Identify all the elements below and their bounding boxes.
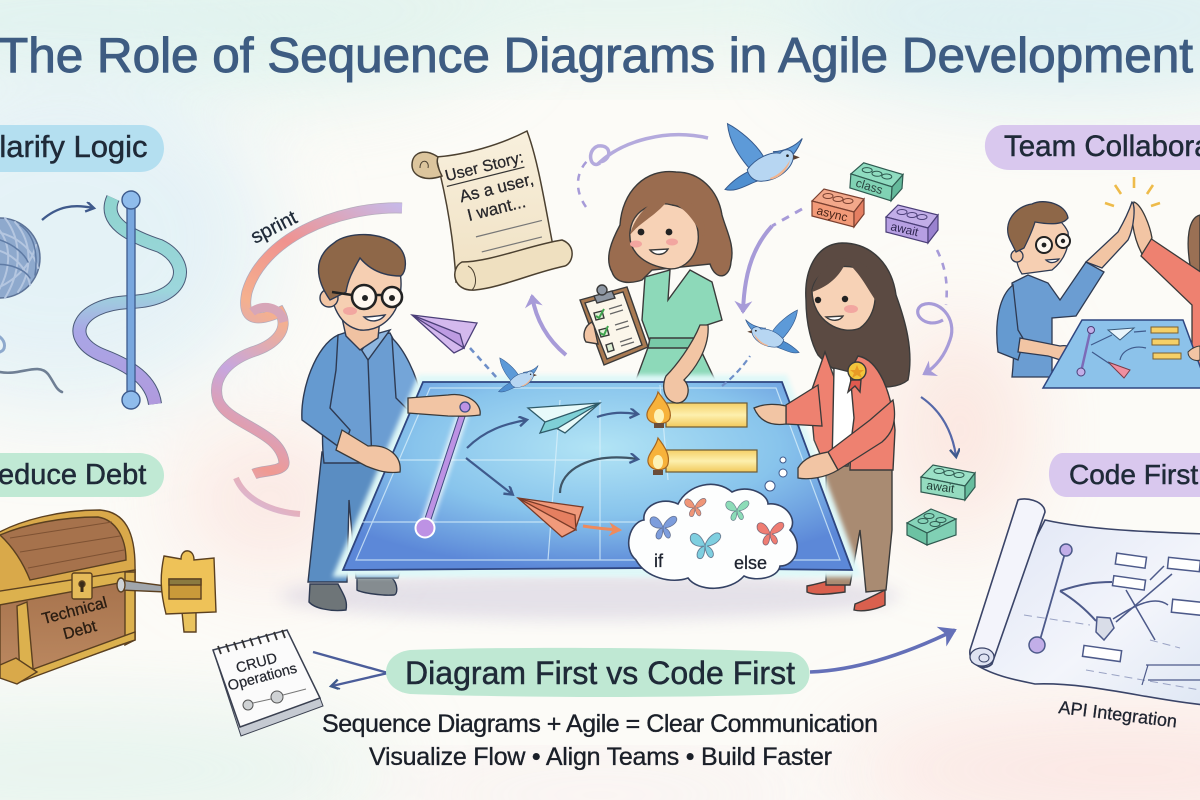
panel: code first — [970, 453, 1200, 731]
character: man with glasses — [302, 235, 420, 611]
heading pill: clarify logic — [0, 125, 164, 172]
arrow: yarn to lifeline — [42, 206, 93, 220]
woman jacket — [810, 352, 838, 468]
heading pill: code first — [1049, 453, 1200, 497]
purple loop arrows — [532, 135, 952, 374]
chest label: Technical — [40, 594, 109, 628]
woman shoes — [807, 577, 885, 611]
icon: bluebird left — [498, 358, 538, 392]
woman hand — [584, 322, 598, 344]
man shirt — [323, 329, 412, 463]
lego brick: await purple: await — [889, 219, 920, 239]
arrow orange — [583, 526, 620, 530]
floor shadow — [280, 572, 900, 620]
ribbon around lifeline — [79, 198, 180, 404]
woman face — [812, 266, 875, 330]
summary text: Visualize Flow • Align Teams • Build Faster — [369, 743, 832, 771]
scroll text: I want... — [465, 192, 528, 225]
notepad: crud operations — [213, 630, 323, 736]
character: woman in coral jacket — [806, 243, 910, 611]
icon: bluebird large — [725, 124, 802, 190]
heading pill: reduce debt — [0, 453, 164, 497]
heading pill: code first: Code First — [1069, 459, 1198, 490]
summary text — [322, 710, 878, 771]
lego brick: class — [849, 162, 904, 202]
arrow: notepad to diagram first — [313, 652, 388, 686]
scroll text: As a user, — [458, 170, 536, 206]
man glasses — [332, 285, 402, 309]
user story scroll — [412, 131, 572, 290]
woman arm over table — [664, 325, 708, 403]
coral teammate — [1132, 202, 1200, 365]
glowing bar 1 — [647, 392, 747, 428]
notepad text: CRUD — [234, 650, 279, 677]
heading pill: team collaboration — [985, 125, 1200, 170]
panel: reduce debt — [0, 453, 216, 684]
icon: bluebird right — [746, 310, 799, 353]
coral woman hands — [754, 404, 838, 479]
woman dress — [636, 270, 722, 380]
badge — [848, 362, 866, 392]
thought cloud — [629, 457, 797, 588]
man trousers — [308, 452, 410, 582]
heading pill: diagram first vs code first: Diagram First vs Code First — [405, 655, 795, 691]
panel: clarify logic — [0, 125, 180, 409]
treasure chest — [0, 510, 135, 684]
purple paper plane — [412, 315, 477, 353]
lego brick: await green: await — [926, 478, 956, 496]
icon: tangled yarn ball — [0, 218, 62, 392]
dashed arrow: table to bird — [722, 356, 750, 386]
dashed trail: plane to bird — [470, 348, 497, 378]
label: if: if — [654, 551, 664, 571]
notepad text: Operations — [226, 661, 299, 694]
glowing bar 2 — [648, 438, 757, 475]
teammate man — [997, 202, 1134, 377]
woman trousers — [826, 460, 892, 592]
summary text: Sequence Diagrams + Agile = Clear Communication — [322, 710, 878, 738]
scroll text: User Story: — [443, 149, 525, 185]
lego brick: await green — [921, 465, 975, 500]
character: woman with clipboard — [580, 172, 732, 380]
mini blueprint — [1043, 320, 1200, 388]
message arrows — [466, 413, 637, 494]
woman face — [630, 204, 698, 269]
lego brick: class: class — [854, 176, 884, 197]
label: sprint: sprint — [247, 206, 301, 248]
label: else: else — [734, 553, 767, 573]
butterflies — [650, 498, 784, 559]
woman hair — [609, 172, 732, 282]
blueprint scroll — [970, 499, 1200, 705]
icon: golden key — [117, 551, 216, 632]
man shoes — [309, 578, 397, 611]
ribbon: sprint — [217, 208, 402, 514]
man neck and head — [342, 318, 380, 350]
chest lock — [72, 573, 92, 599]
paper plane orange — [518, 498, 583, 537]
clipboard — [580, 285, 648, 365]
woman hair back — [806, 243, 910, 387]
coral sleeves — [786, 385, 895, 470]
lego brick: async — [812, 189, 864, 227]
blueprint table — [343, 382, 852, 588]
lego brick: blank green — [907, 509, 956, 545]
arrow: to await brick — [921, 397, 956, 456]
paper plane teal — [528, 403, 600, 433]
lego brick: await purple — [886, 205, 938, 243]
lego brick: async: async — [815, 203, 849, 224]
title: The Role of Sequence Diagrams in Agile Development — [0, 28, 1193, 83]
sequence lifeline — [122, 191, 140, 409]
scroll text — [443, 148, 547, 256]
notepad text — [222, 646, 299, 694]
man lifeline cap — [460, 402, 470, 412]
arrow: diagram first to blueprint — [810, 630, 955, 672]
panel: team collaboration — [985, 125, 1200, 388]
arms over table — [336, 325, 895, 479]
chest label: Debt — [61, 618, 99, 643]
heading pill: diagram first vs code first — [386, 648, 810, 697]
label: api integration: API Integration — [1058, 697, 1178, 731]
high five sparkles — [1105, 177, 1160, 206]
diagram on scroll — [1024, 544, 1200, 690]
chest label — [40, 594, 114, 647]
man arms — [336, 395, 480, 473]
lifeline on table — [416, 410, 464, 538]
